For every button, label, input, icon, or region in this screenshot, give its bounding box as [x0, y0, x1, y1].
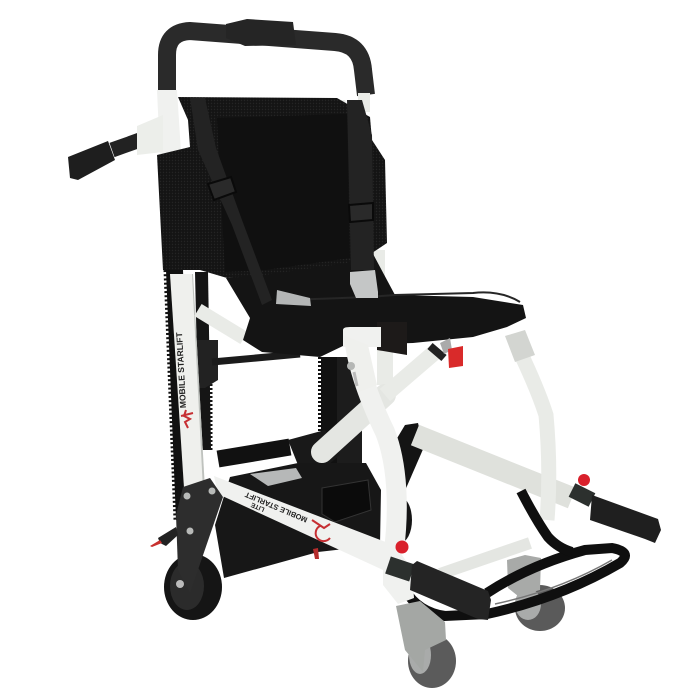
back wheel behind frame	[388, 497, 412, 543]
upper cross rod	[212, 354, 300, 362]
right upright	[505, 330, 549, 520]
footrest arm	[521, 491, 572, 552]
battery label	[250, 468, 302, 486]
right black bracket	[393, 423, 424, 495]
front caster	[396, 601, 456, 688]
black seat block	[377, 322, 407, 355]
left grip	[68, 141, 115, 180]
rear handle bar	[167, 19, 366, 95]
seat cross tube	[198, 310, 244, 338]
battery pack	[215, 463, 381, 578]
tube sub logo text: LITE	[249, 500, 266, 513]
footrest tube behind	[405, 548, 625, 616]
front cross tube	[415, 435, 572, 498]
left lower grip	[388, 561, 491, 620]
right white post	[337, 93, 370, 112]
tube red logo	[312, 520, 330, 541]
back left track	[195, 272, 362, 470]
shoulder strap right	[347, 100, 374, 270]
back cushion	[157, 97, 387, 278]
front diagonal tube	[322, 338, 452, 452]
battery clip	[322, 480, 371, 522]
left white post	[137, 90, 181, 156]
rail logo text: MOBILE STARLIFT	[174, 331, 188, 408]
black side plate	[176, 478, 223, 593]
rear wheel	[164, 554, 222, 620]
footrest link rod	[440, 543, 530, 574]
lower red latch	[313, 548, 319, 559]
right lower grip	[572, 490, 661, 543]
red knob right	[578, 474, 590, 486]
brake lever	[150, 527, 178, 547]
side curved frame	[343, 335, 397, 550]
tube logo text: MOBILE STARLIFT	[243, 490, 309, 524]
main serrated track	[166, 270, 192, 520]
frame bolt	[347, 362, 355, 370]
rear white support tube	[373, 250, 393, 385]
strap slider right	[349, 203, 373, 222]
lower main white tube	[214, 476, 414, 604]
shoulder strap left	[190, 98, 272, 305]
rail red logo	[181, 410, 193, 428]
upright bracket	[505, 330, 535, 362]
seat fabric	[226, 252, 526, 357]
strap slider left	[208, 177, 236, 200]
seat belt buckle right	[350, 270, 378, 298]
left handle	[68, 140, 140, 180]
red knob left	[396, 540, 408, 554]
handle grip	[226, 19, 296, 46]
left white rail	[170, 274, 205, 490]
footrest tube highlight	[495, 560, 612, 604]
red lever	[448, 346, 463, 368]
back of front casters	[507, 555, 565, 631]
lower black rod and bracket	[218, 430, 340, 480]
seat belt buckle left	[276, 290, 311, 306]
seat white tube	[343, 327, 381, 347]
